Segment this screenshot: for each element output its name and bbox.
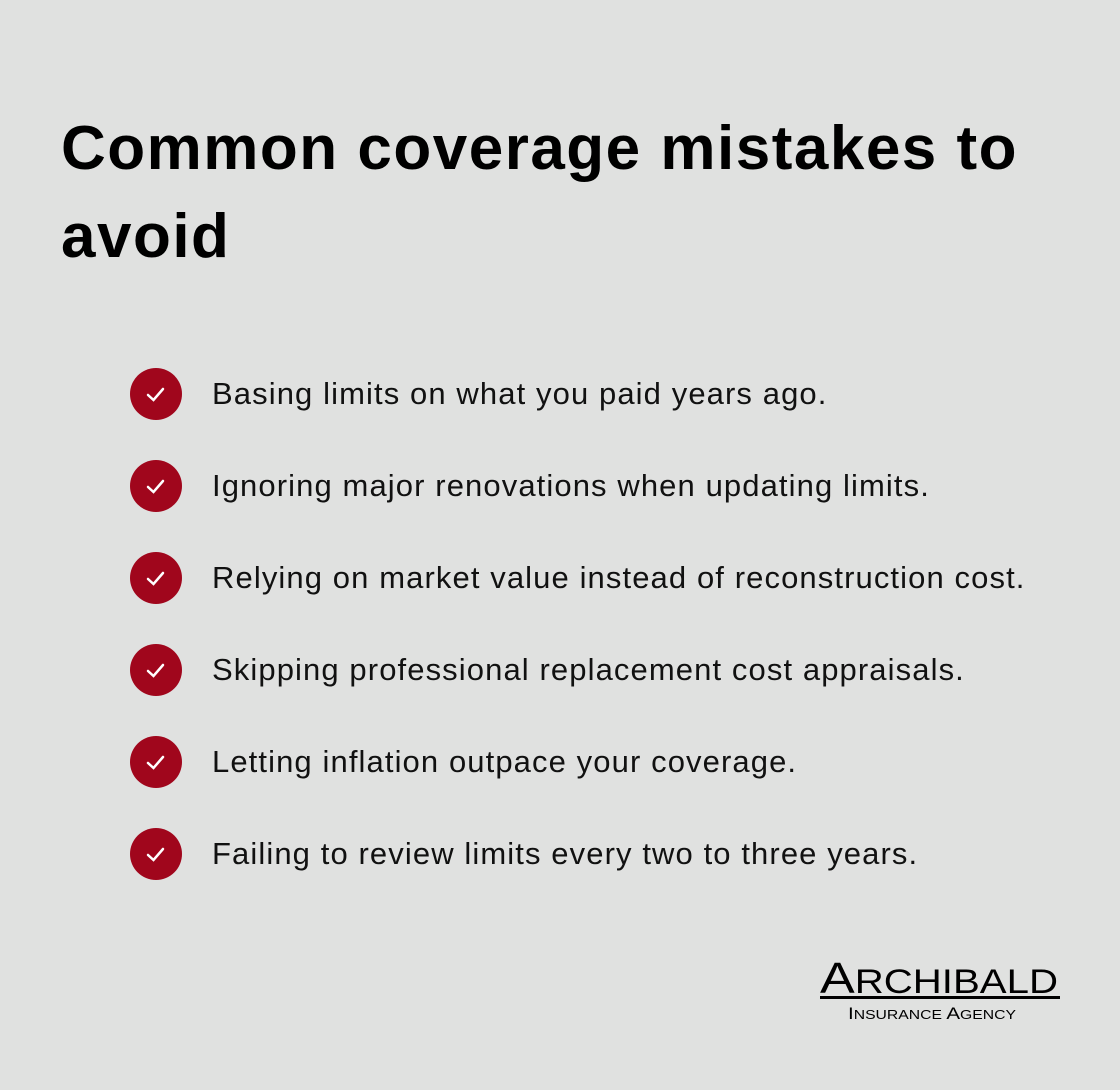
item 1: Basing limits on what you paid years ago. bbox=[212, 376, 827, 411]
item 5 bbox=[130, 736, 797, 788]
item 4: Skipping professional replacement cost appraisals. bbox=[212, 652, 965, 687]
item 2 bbox=[130, 460, 930, 512]
logo bbox=[820, 954, 1060, 1023]
item 3 bbox=[130, 552, 1026, 604]
item 6: Failing to review limits every two to three years. bbox=[212, 836, 918, 871]
item 2: Ignoring major renovations when updating limits. bbox=[212, 468, 930, 503]
item 1 bbox=[130, 368, 827, 420]
item 6 bbox=[130, 828, 918, 880]
logo: INSURANCE AGENCY bbox=[848, 1004, 1016, 1023]
item 5: Letting inflation outpace your coverage. bbox=[212, 744, 797, 779]
title: Common coverage mistakes to avoid bbox=[61, 114, 1018, 271]
item 4 bbox=[130, 644, 965, 696]
logo: ARCHIBALD bbox=[820, 954, 1058, 1003]
item 3: Relying on market value instead of reconstruction cost. bbox=[212, 560, 1026, 595]
